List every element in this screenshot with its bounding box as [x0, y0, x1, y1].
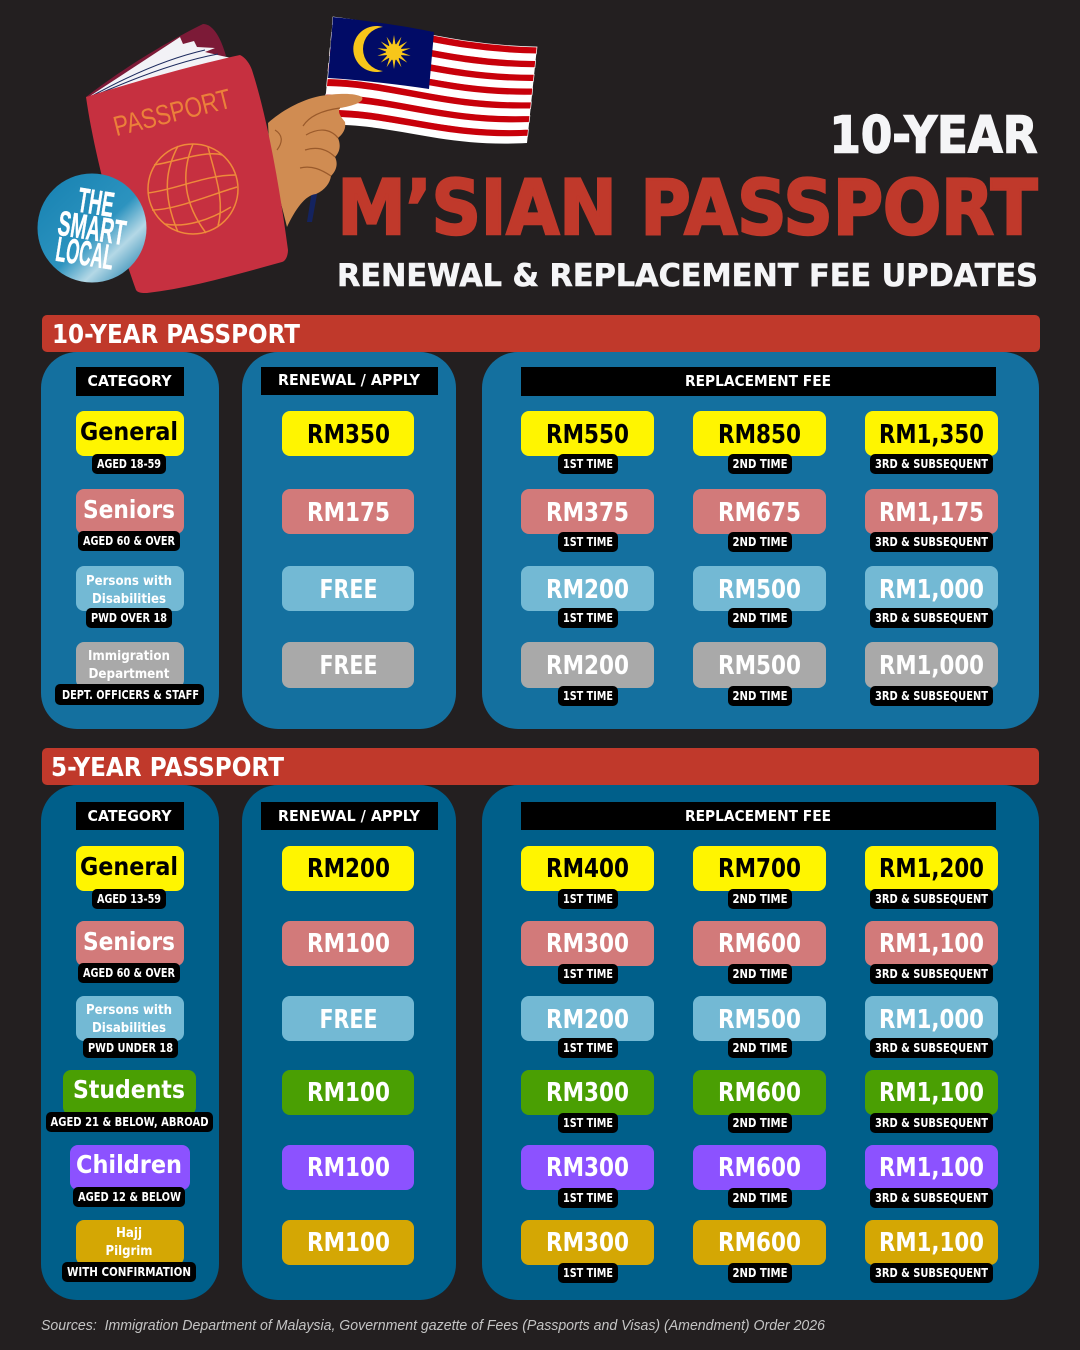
- PWD 3rd time: 3RD & SUBSEQUENT: [875, 611, 989, 625]
- category: general: [76, 846, 184, 909]
- seniors 2nd time: RM675: [718, 498, 801, 528]
- panel: 5-year renewal / apply: [242, 785, 456, 1300]
- PWD 1st time: [521, 566, 654, 628]
- seniors 3rd time: RM1,100: [879, 929, 984, 959]
- category: hajj pilgrim: Hajj: [116, 1225, 142, 1241]
- hajj 2nd time: RM600: [718, 1228, 801, 1258]
- PWD 2nd time: RM500: [718, 1005, 801, 1035]
- header: category: [76, 367, 184, 396]
- general 1st time: 1ST TIME: [563, 457, 613, 471]
- category: immigration department: Department: [88, 666, 170, 682]
- category: general: [76, 411, 184, 474]
- panel: 10-year renewal / apply: [242, 352, 456, 729]
- seniors 1st time: 1ST TIME: [563, 535, 613, 549]
- PWD 1st time: [521, 996, 654, 1058]
- category: persons with disabilities: [76, 996, 184, 1058]
- fee: PWD free: FREE: [320, 575, 378, 605]
- category: persons with disabilities: PWD OVER 18: [91, 611, 167, 625]
- header: renewal / apply: [261, 367, 438, 395]
- category: seniors: [76, 489, 184, 551]
- students 3rd time: 3RD & SUBSEQUENT: [875, 1116, 989, 1130]
- fee: immigration free: FREE: [320, 651, 378, 681]
- PWD 1st time: RM200: [546, 1005, 629, 1035]
- header: renewal / apply: RENEWAL / APPLY: [278, 371, 421, 389]
- category: persons with disabilities: Disabilities: [92, 591, 166, 607]
- header: category: CATEGORY: [88, 807, 173, 825]
- general 3rd time: 3RD & SUBSEQUENT: [875, 892, 989, 906]
- category: students: [46, 1070, 213, 1132]
- category: children: AGED 12 & BELOW: [78, 1190, 181, 1204]
- PWD 1st time: 1ST TIME: [563, 1041, 613, 1055]
- PWD 2nd time: [693, 996, 826, 1058]
- general 2nd time: 2ND TIME: [732, 457, 788, 471]
- immigration 2nd time: RM500: [718, 651, 801, 681]
- fee: general RM350: [282, 411, 414, 456]
- seniors 2nd time: 2ND TIME: [732, 967, 788, 981]
- general 1st time: [521, 411, 654, 474]
- general 2nd time: 2ND TIME: [732, 892, 788, 906]
- fee: PWD free: FREE: [320, 1005, 378, 1035]
- students 3rd time: [865, 1070, 998, 1133]
- category: hajj pilgrim: [62, 1220, 196, 1282]
- seniors 2nd time: RM600: [718, 929, 801, 959]
- passport back cover: [86, 24, 226, 97]
- seniors 3rd time: [865, 489, 998, 552]
- children 2nd time: 2ND TIME: [732, 1191, 788, 1205]
- panel: 10-year category: [41, 352, 219, 729]
- illustration: hand holding Malaysian flag: [268, 17, 537, 227]
- children 3rd time: [865, 1145, 998, 1208]
- fee: general RM200: [282, 846, 414, 891]
- fee: hajj RM100: RM100: [307, 1228, 390, 1258]
- category: persons with disabilities: Persons with: [86, 573, 172, 589]
- seniors 1st time: 1ST TIME: [563, 967, 613, 981]
- hajj 2nd time: [693, 1220, 826, 1283]
- PWD 2nd time: 2ND TIME: [732, 1041, 788, 1055]
- header: replacement fee: REPLACEMENT FEE: [685, 372, 831, 390]
- children 2nd time: RM600: [718, 1153, 801, 1183]
- seniors 1st time: RM300: [546, 929, 629, 959]
- logo: The Smart Local: [38, 174, 146, 282]
- general 3rd time: RM1,350: [879, 420, 984, 450]
- fee: seniors RM100: [282, 921, 414, 966]
- immigration 1st time: [521, 642, 654, 706]
- PWD 2nd time: 2ND TIME: [732, 611, 788, 625]
- children 3rd time: 3RD & SUBSEQUENT: [875, 1191, 989, 1205]
- PWD 3rd time: [865, 996, 998, 1058]
- subtitle: RENEWAL & REPLACEMENT FEE UPDATES: [337, 258, 1038, 294]
- PWD 3rd time: 3RD & SUBSEQUENT: [875, 1041, 989, 1055]
- category: seniors: [76, 921, 184, 983]
- illustration: passport: [86, 24, 288, 293]
- general 2nd time: [693, 846, 826, 909]
- logo: The Smart Local: LOCAL: [53, 230, 117, 278]
- category: students: Students: [73, 1075, 185, 1104]
- fee: immigration free: [282, 642, 414, 688]
- PWD 3rd time: RM1,000: [879, 1005, 984, 1035]
- category: children: Children: [76, 1150, 182, 1179]
- PWD 3rd time: [865, 566, 998, 628]
- hajj 1st time: RM300: [546, 1228, 629, 1258]
- category: seniors: AGED 60 & OVER: [83, 534, 175, 548]
- category: seniors: Seniors: [83, 495, 175, 524]
- general 3rd time: [865, 846, 998, 909]
- category: hajj pilgrim: Pilgrim: [106, 1243, 152, 1259]
- immigration 3rd time: 3RD & SUBSEQUENT: [875, 689, 989, 703]
- students 2nd time: [693, 1070, 826, 1133]
- fee: PWD free: [282, 566, 414, 611]
- hand: [268, 94, 362, 227]
- section banner: 10-year passport: [42, 315, 1040, 352]
- general 1st time: RM400: [546, 854, 629, 884]
- fee: students RM100: RM100: [307, 1078, 390, 1108]
- title block: [337, 106, 1038, 294]
- fee: children RM100: RM100: [307, 1153, 390, 1183]
- fee: students RM100: [282, 1070, 414, 1115]
- Malaysian flag: [323, 17, 537, 144]
- category: persons with disabilities: Persons with: [86, 1002, 172, 1018]
- fee: general RM350: RM350: [307, 420, 390, 450]
- category: students: AGED 21 & BELOW, ABROAD: [50, 1115, 209, 1129]
- general 2nd time: RM850: [718, 420, 801, 450]
- hajj 3rd time: 3RD & SUBSEQUENT: [875, 1266, 989, 1280]
- category: seniors: AGED 60 & OVER: [83, 966, 175, 980]
- seniors 1st time: [521, 489, 654, 552]
- category: immigration department: Immigration: [88, 648, 170, 664]
- general 3rd time: 3RD & SUBSEQUENT: [875, 457, 989, 471]
- category: seniors: Seniors: [83, 927, 175, 956]
- general 2nd time: [693, 411, 826, 474]
- immigration 1st time: RM200: [546, 651, 629, 681]
- category: persons with disabilities: PWD UNDER 18: [88, 1041, 173, 1055]
- title: 10-YEAR: 10-YEAR: [830, 106, 1038, 166]
- panel: 5-year category: [41, 785, 219, 1300]
- hajj 3rd time: [865, 1220, 998, 1283]
- passport cover lettering: PASSPORT: [110, 83, 234, 142]
- fee: PWD free: [282, 996, 414, 1041]
- fee: general RM200: RM200: [307, 854, 390, 884]
- PWD 2nd time: [693, 566, 826, 628]
- category: immigration department: DEPT. OFFICERS & STAFF: [62, 688, 199, 702]
- students 1st time: 1ST TIME: [563, 1116, 613, 1130]
- students 2nd time: RM600: [718, 1078, 801, 1108]
- header: category: [76, 802, 184, 830]
- sources note: Sources: Immigration Department of Malaysia, Government gazette of Fees (Passports and Visas) (Amendment) Order 2026: [41, 1318, 826, 1334]
- header: replacement fee: [521, 802, 996, 830]
- general 3rd time: [865, 411, 998, 474]
- logo: The Smart Local: THE: [75, 181, 117, 225]
- category: hajj pilgrim: WITH CONFIRMATION: [67, 1265, 191, 1279]
- header: category: CATEGORY: [88, 372, 173, 390]
- fee: seniors RM175: [282, 489, 414, 534]
- PWD 3rd time: RM1,000: [879, 575, 984, 605]
- students 3rd time: RM1,100: [879, 1078, 984, 1108]
- header: renewal / apply: [261, 802, 438, 830]
- seniors 1st time: [521, 921, 654, 984]
- section banner: 10-year passport: 10-YEAR PASSPORT: [52, 320, 301, 350]
- panel: 10-year replacement fee: [482, 352, 1039, 729]
- students 1st time: RM300: [546, 1078, 629, 1108]
- PWD 1st time: 1ST TIME: [563, 611, 613, 625]
- section banner: 5-year passport: 5-YEAR PASSPORT: [51, 753, 285, 783]
- seniors 3rd time: 3RD & SUBSEQUENT: [875, 967, 989, 981]
- seniors 3rd time: 3RD & SUBSEQUENT: [875, 535, 989, 549]
- header: replacement fee: REPLACEMENT FEE: [685, 807, 831, 825]
- category: general: AGED 18-59: [97, 457, 161, 471]
- children 1st time: 1ST TIME: [563, 1191, 613, 1205]
- general 3rd time: RM1,200: [879, 854, 984, 884]
- hajj 1st time: 1ST TIME: [563, 1266, 613, 1280]
- category: general: AGED 13-59: [97, 892, 161, 906]
- logo: The Smart Local: SMART: [55, 204, 129, 253]
- general 1st time: 1ST TIME: [563, 892, 613, 906]
- immigration 1st time: 1ST TIME: [563, 689, 613, 703]
- immigration 2nd time: [693, 642, 826, 706]
- seniors 2nd time: [693, 921, 826, 984]
- children 3rd time: RM1,100: [879, 1153, 984, 1183]
- hajj 1st time: [521, 1220, 654, 1283]
- immigration 3rd time: [865, 642, 998, 706]
- students 2nd time: 2ND TIME: [732, 1116, 788, 1130]
- general 1st time: RM550: [546, 420, 629, 450]
- passport front cover: [86, 55, 288, 293]
- category: persons with disabilities: Disabilities: [92, 1020, 166, 1036]
- fee: hajj RM100: [282, 1220, 414, 1265]
- passport pages: [90, 37, 232, 96]
- children 1st time: [521, 1145, 654, 1208]
- seniors 1st time: RM375: [546, 498, 629, 528]
- globe emblem: [148, 144, 238, 234]
- hajj 3rd time: RM1,100: [879, 1228, 984, 1258]
- immigration 2nd time: 2ND TIME: [732, 689, 788, 703]
- students 1st time: [521, 1070, 654, 1133]
- general 1st time: [521, 846, 654, 909]
- fee: children RM100: [282, 1145, 414, 1190]
- children 2nd time: [693, 1145, 826, 1208]
- seniors 3rd time: [865, 921, 998, 984]
- flag pole: [307, 178, 320, 222]
- panel: 5-year replacement fee: [482, 785, 1039, 1300]
- category: general: General: [80, 417, 178, 446]
- seniors 2nd time: [693, 489, 826, 552]
- header: renewal / apply: RENEWAL / APPLY: [278, 807, 421, 825]
- PWD 1st time: RM200: [546, 575, 629, 605]
- fee: seniors RM175: RM175: [307, 498, 390, 528]
- section banner: 5-year passport: [42, 748, 1039, 785]
- immigration 3rd time: RM1,000: [879, 651, 984, 681]
- seniors 2nd time: 2ND TIME: [732, 535, 788, 549]
- hajj 2nd time: 2ND TIME: [732, 1266, 788, 1280]
- category: persons with disabilities: [76, 566, 184, 628]
- PWD 2nd time: RM500: [718, 575, 801, 605]
- fee: seniors RM100: RM100: [307, 929, 390, 959]
- category: general: General: [80, 852, 178, 881]
- category: immigration department: [55, 642, 204, 705]
- category: children: [70, 1145, 190, 1207]
- header: replacement fee: [521, 367, 996, 396]
- general 2nd time: RM700: [718, 854, 801, 884]
- children 1st time: RM300: [546, 1153, 629, 1183]
- seniors 3rd time: RM1,175: [879, 498, 984, 528]
